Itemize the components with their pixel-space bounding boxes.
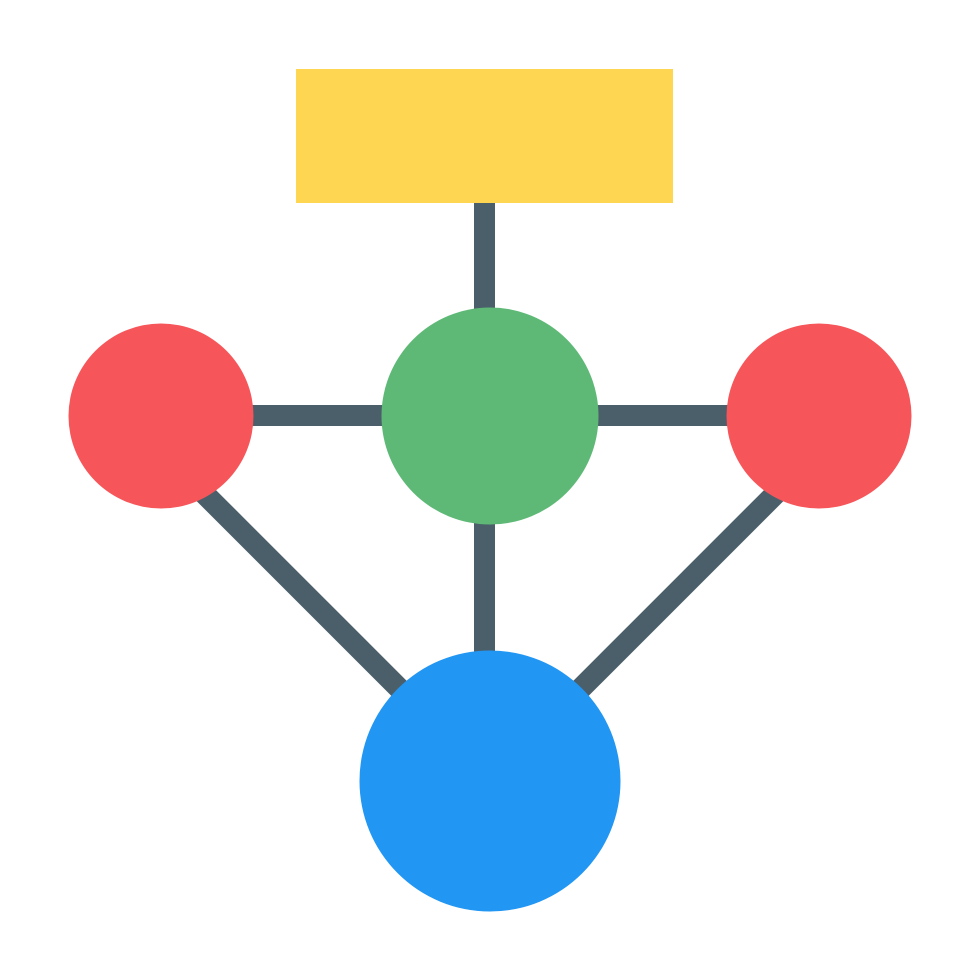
right red node [726,324,912,508]
blue bottom node [360,650,620,912]
connector: green node to right red [590,405,735,426]
left red node [68,324,254,508]
connector: rectangle to green node [474,200,495,315]
yellow rectangle [296,69,673,203]
connector lines [190,200,790,709]
green centre node [382,308,598,524]
connector: right red to blue node [560,479,790,709]
connector: green node to blue node [474,515,495,660]
connector: left red to green node [245,405,390,426]
connector: left red to blue node [190,479,420,709]
